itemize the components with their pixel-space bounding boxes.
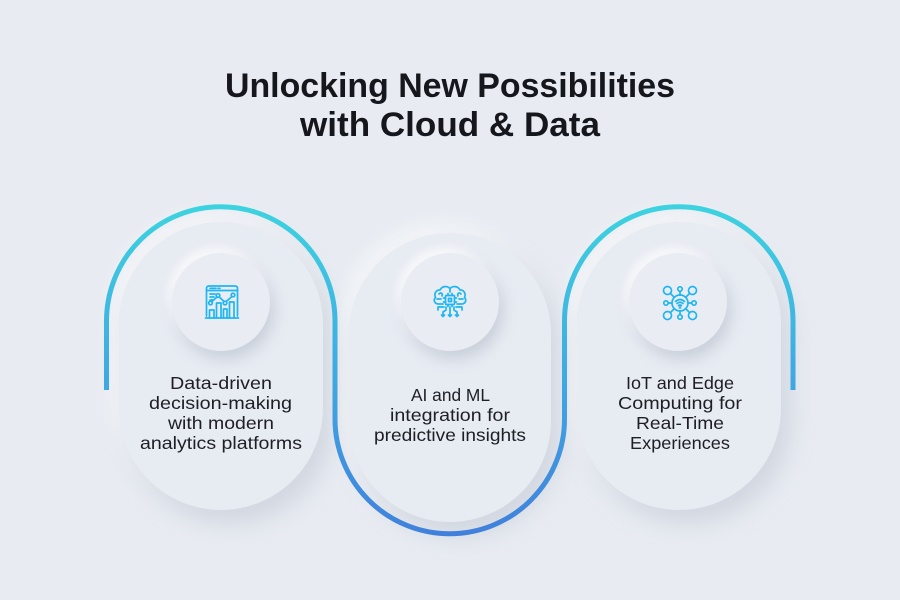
icon circle: AI (401, 253, 499, 351)
text: AI and ML (374, 385, 526, 445)
icon circle: IoT (629, 253, 727, 351)
text: IoT and Edge: Experiences (630, 433, 730, 453)
text: AI and ML: integration for (390, 405, 510, 425)
icon circle: analytics (172, 253, 270, 351)
title (225, 67, 675, 144)
text: analytics: Data-driven (170, 373, 272, 393)
title: with Cloud & Data (299, 106, 601, 144)
title: Unlocking New Possibilities (225, 67, 675, 105)
text: AI and ML: AI and ML (411, 385, 490, 405)
text: analytics (140, 373, 302, 453)
icon: brain chip (433, 286, 467, 318)
text: IoT and Edge: IoT and Edge (626, 373, 734, 393)
text: AI and ML: predictive insights (374, 425, 526, 445)
text: IoT and Edge: Real-Time (636, 413, 724, 433)
panel: analytics (119, 222, 323, 510)
icon: analytics dashboard (204, 285, 240, 319)
icon: connected wifi hub (662, 286, 698, 320)
text: analytics: analytics platforms (140, 433, 302, 453)
text: analytics: decision-making (149, 393, 292, 413)
text: IoT and Edge (618, 373, 742, 453)
text: IoT and Edge: Computing for (618, 393, 742, 413)
panel: AI and ML (349, 233, 551, 522)
panel: IoT and Edge (577, 222, 781, 510)
text: analytics: with modern (167, 413, 274, 433)
